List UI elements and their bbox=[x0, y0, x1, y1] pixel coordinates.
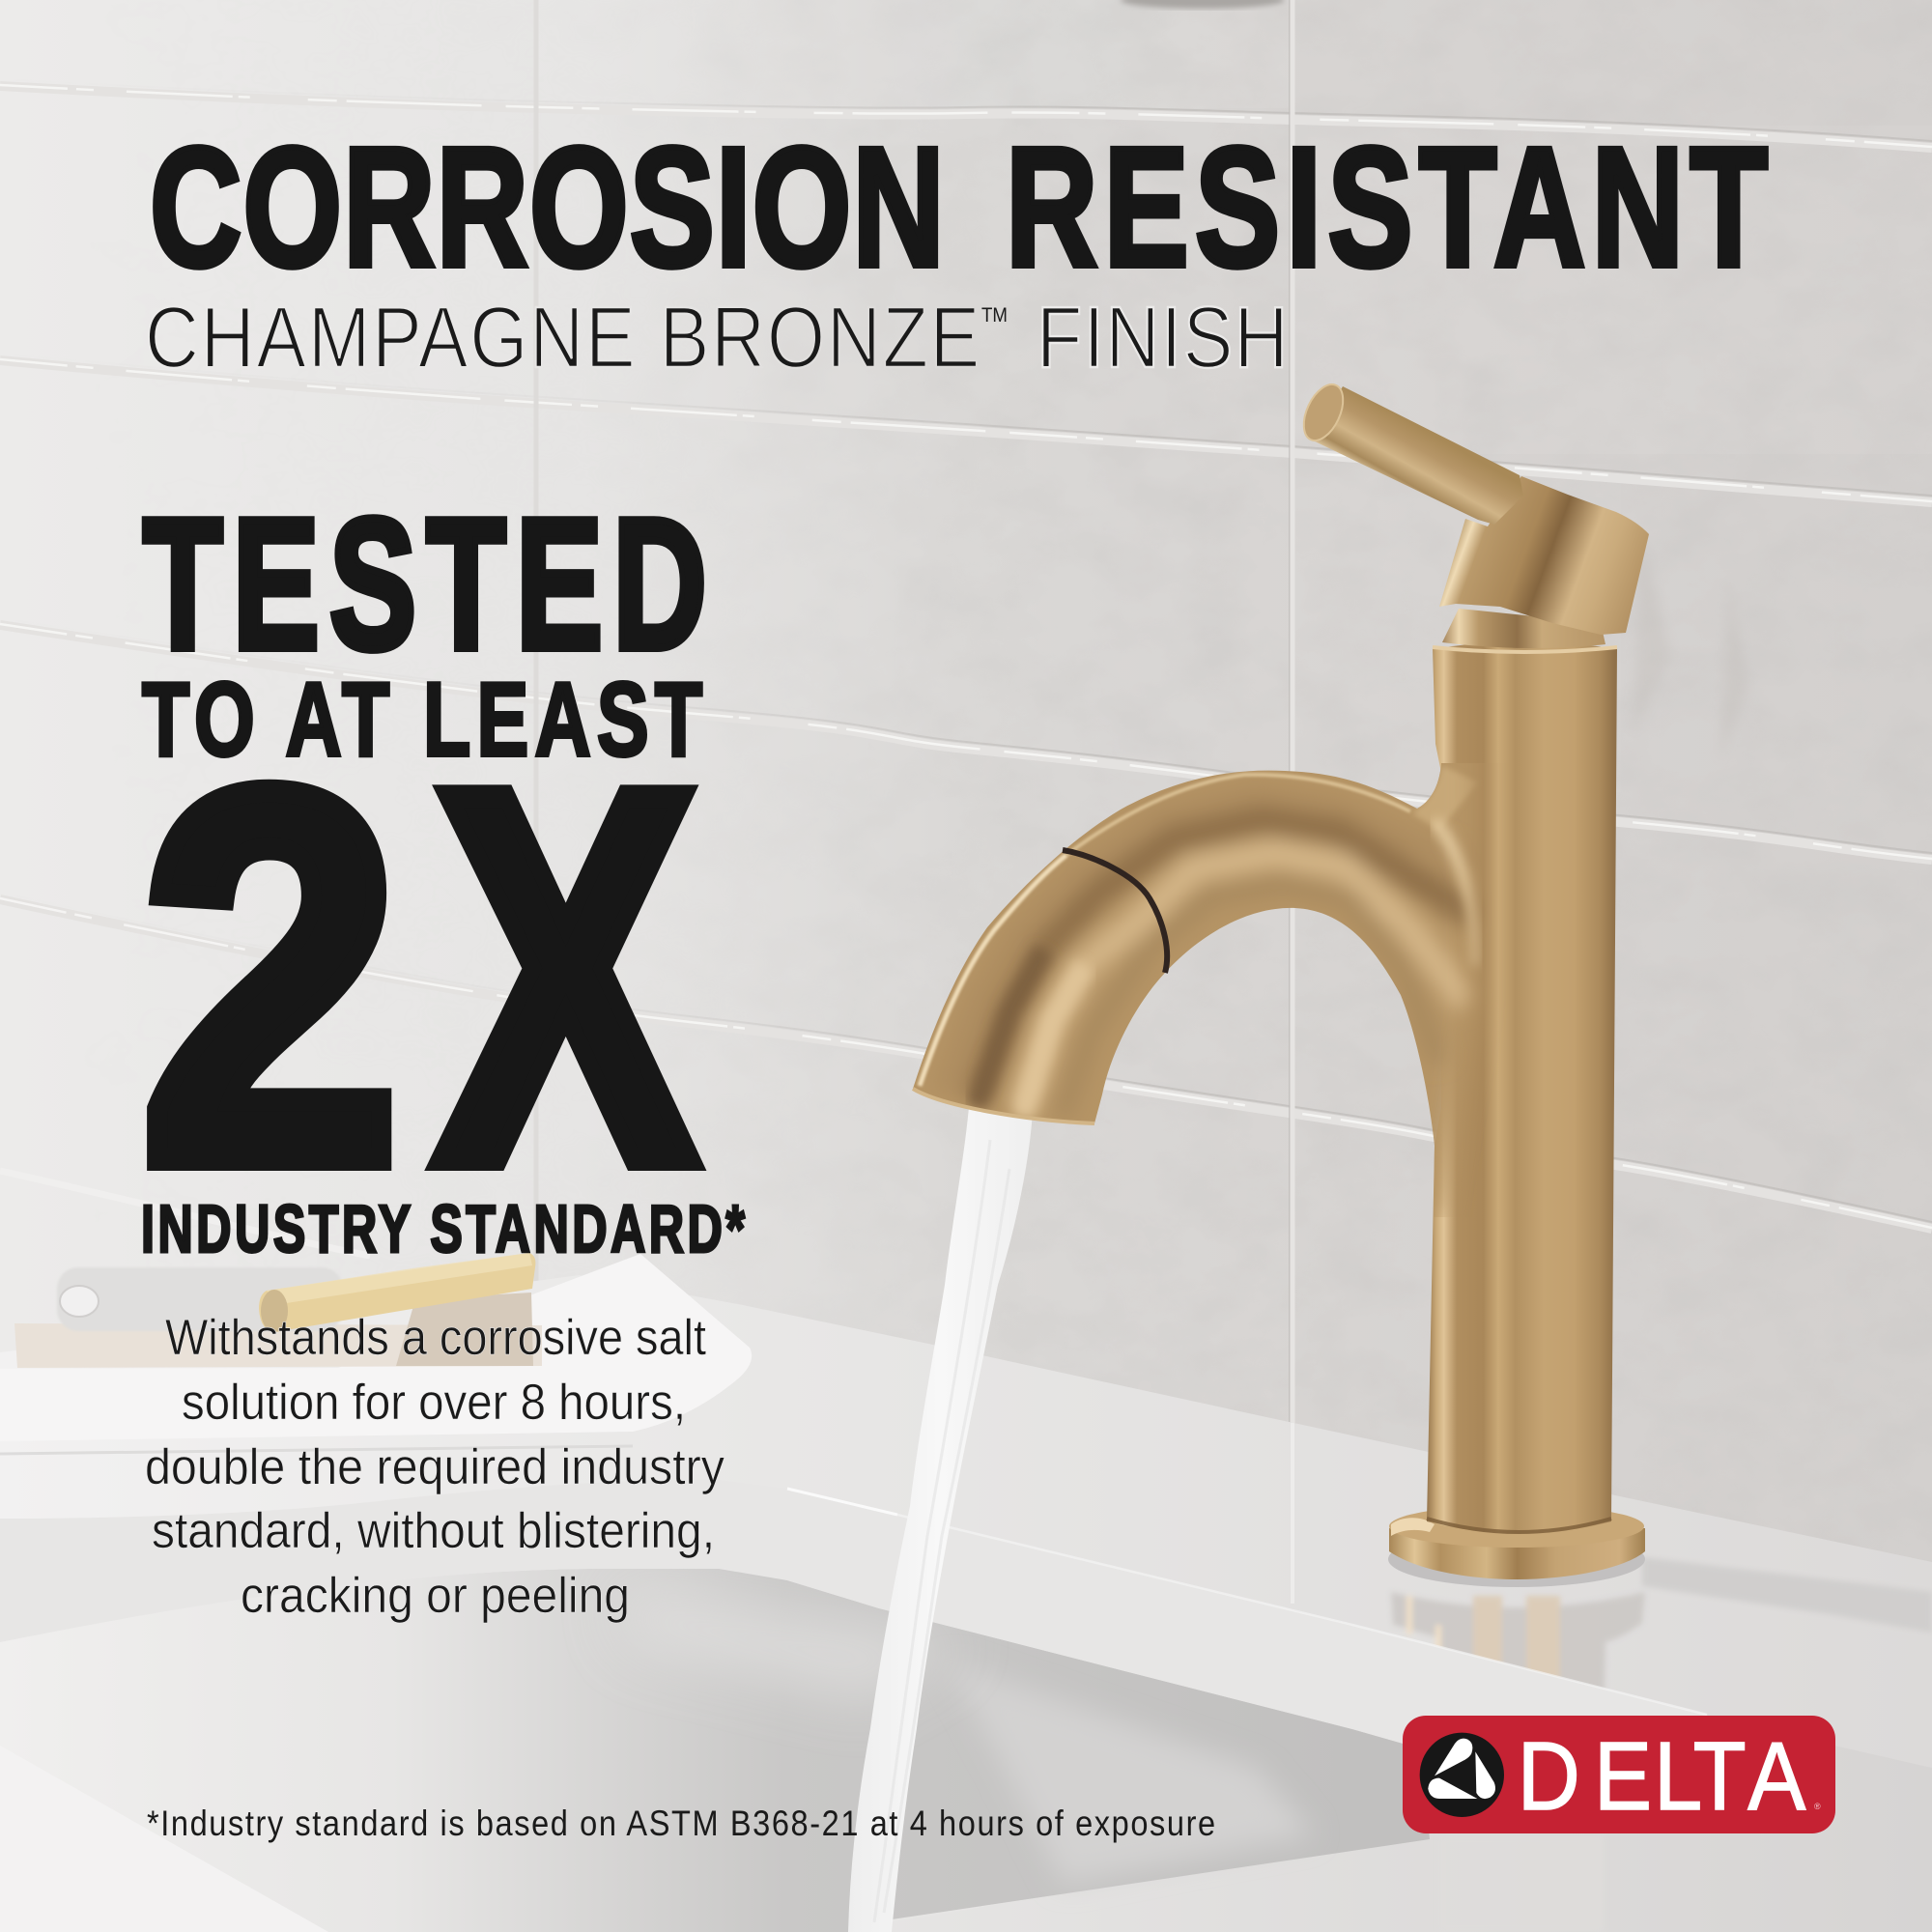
subtitle: FINISH bbox=[1037, 289, 1289, 385]
description text block: double the required industry bbox=[145, 1439, 724, 1495]
background objects: books, lid and lipstick bbox=[14, 1253, 542, 1368]
faucet body column bbox=[1427, 641, 1617, 1534]
tray under the text bbox=[0, 1254, 752, 1441]
description text block bbox=[145, 1310, 724, 1624]
icon: Delta triangle mark bbox=[1420, 1733, 1504, 1817]
description text block: Withstands a corrosive salt bbox=[165, 1310, 706, 1366]
headline: tested to at least 2X: X bbox=[437, 682, 696, 1271]
spout lip edge bbox=[913, 1089, 1094, 1123]
headline: tested to at least 2X: 2 bbox=[141, 682, 400, 1271]
headline: tested to at least 2X bbox=[141, 480, 745, 1271]
faucet base flange bbox=[1388, 1505, 1645, 1587]
faucet reflection on the counter bbox=[1391, 1592, 1645, 1729]
description text block: standard, without blistering, bbox=[152, 1503, 715, 1559]
faucet spout bbox=[913, 763, 1482, 1217]
headline: tested to at least 2X: INDUSTRY STANDARD* bbox=[141, 1191, 745, 1266]
subtitle: CHAMPAGNE BRONZE bbox=[145, 289, 980, 385]
logo: Delta bbox=[1403, 1716, 1835, 1833]
handle lever bbox=[1295, 379, 1523, 525]
faucet bbox=[869, 379, 1649, 1587]
spout dark ring bbox=[1063, 850, 1167, 973]
logo: Delta: DELTA bbox=[1518, 1723, 1806, 1831]
water stream bbox=[848, 1107, 1033, 1932]
description text block: solution for over 8 hours, bbox=[182, 1375, 686, 1431]
countertop and sink basin bbox=[0, 1254, 1932, 1932]
handle cap bbox=[1439, 476, 1649, 635]
subtitle: TM bbox=[981, 304, 1008, 327]
headline: tested to at least 2X: TESTED bbox=[143, 480, 707, 689]
logo: Delta: ® bbox=[1814, 1802, 1821, 1811]
counter front edge bbox=[0, 1480, 1739, 1748]
title: CORROSION bbox=[150, 111, 945, 301]
footnote: *Industry standard is based on ASTM B368-21 at 4 hours of exposure bbox=[147, 1804, 1215, 1843]
title bbox=[150, 111, 1768, 301]
title: RESISTANT bbox=[1006, 111, 1768, 301]
headline: tested to at least 2X: TO AT LEAST bbox=[142, 661, 702, 779]
description text block: cracking or peeling bbox=[241, 1568, 630, 1624]
sink basin interior bbox=[0, 1569, 1430, 1932]
counter front lower area bbox=[850, 1719, 1932, 1932]
handle neck bbox=[1442, 609, 1605, 648]
